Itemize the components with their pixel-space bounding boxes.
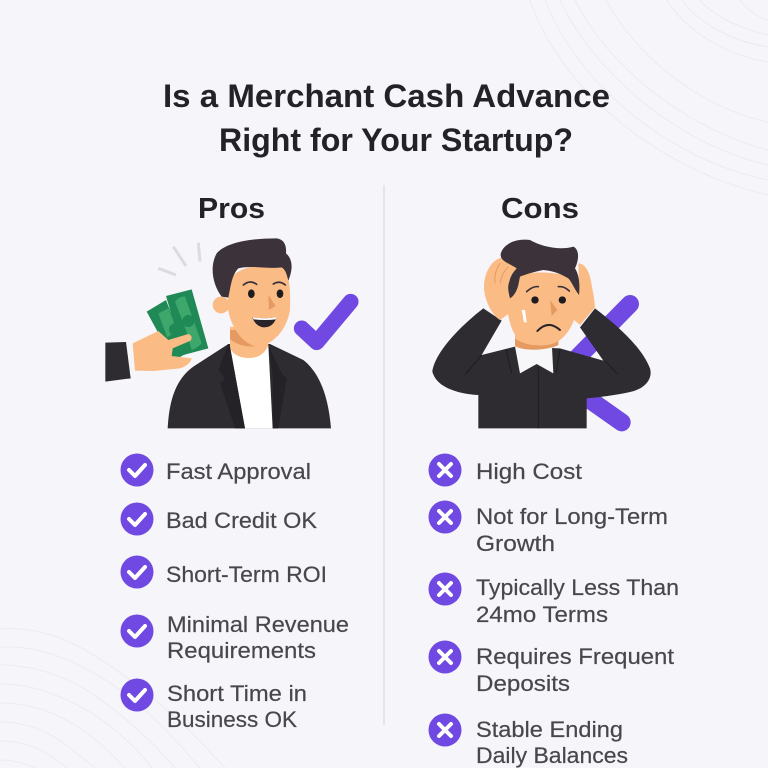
item: Requires Frequent Deposits: Deposits (476, 671, 570, 696)
item: Stable Ending Daily Balances: Daily Balances (476, 743, 628, 768)
item: Not for Long-Term Growth: Growth (476, 531, 555, 556)
heading: Pros: Pros (198, 193, 265, 225)
item: High Cost: High Cost (476, 459, 583, 484)
item: Short Time in Business OK: Short Time in (167, 681, 307, 706)
illustration: happy man receiving cash (105, 238, 351, 428)
heading: Cons: Cons (501, 193, 579, 225)
item: Typically Less Than 24mo Terms (428, 572, 679, 627)
item: Typically Less Than 24mo Terms: Typically Less Than (476, 575, 679, 600)
item: Short-Term ROI: Short-Term ROI (166, 562, 327, 587)
title (163, 78, 610, 158)
item: Minimal Revenue Requirements (120, 612, 349, 663)
title: Is a Merchant Cash Advance (163, 78, 610, 114)
item: Requires Frequent Deposits (428, 640, 675, 696)
item: Short Time in Business OK (120, 678, 307, 732)
item: Stable Ending Daily Balances: Stable Ending (476, 717, 623, 742)
item: Stable Ending Daily Balances (428, 714, 628, 768)
illustration: worried man holding head (432, 240, 651, 428)
pros list (120, 454, 349, 732)
item: Requires Frequent Deposits: Requires Frequent (476, 644, 675, 669)
item: Typically Less Than 24mo Terms: 24mo Terms (476, 602, 608, 627)
item: Not for Long-Term Growth: Not for Long-Term (476, 504, 668, 529)
item: Short Time in Business OK: Business OK (167, 707, 297, 732)
item: Short-Term ROI (120, 556, 327, 588)
cons list (428, 454, 679, 768)
item: Bad Credit OK: Bad Credit OK (166, 508, 317, 533)
item: High Cost (428, 454, 583, 486)
item: Minimal Revenue Requirements: Minimal Revenue (167, 612, 349, 637)
item: Not for Long-Term Growth (428, 500, 668, 556)
item: Fast Approval (120, 454, 311, 486)
title: Right for Your Startup? (219, 122, 573, 158)
item: Bad Credit OK (120, 502, 317, 536)
item: Minimal Revenue Requirements: Requirements (167, 638, 316, 663)
item: Fast Approval: Fast Approval (166, 459, 311, 484)
